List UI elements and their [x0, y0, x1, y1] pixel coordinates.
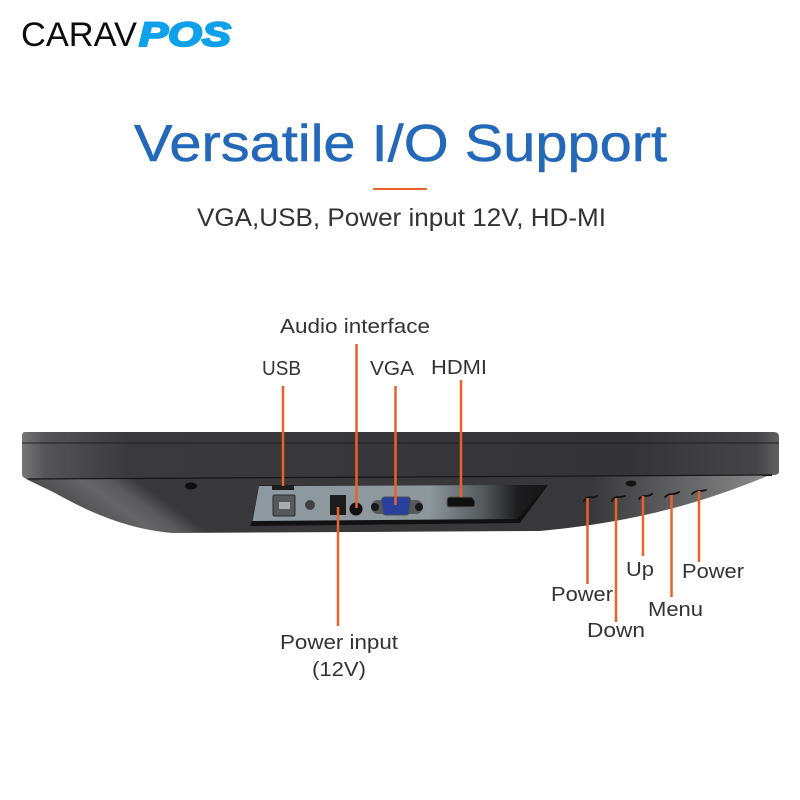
logo — [21, 16, 231, 54]
logo: CARAV — [21, 16, 137, 54]
label: HDMI: HDMI — [431, 357, 487, 379]
pointer: power button — [586, 498, 589, 584]
VGA port — [371, 497, 423, 515]
port plate — [252, 485, 547, 524]
logo: POS — [139, 16, 231, 54]
band bottom shadow line — [28, 475, 772, 479]
pointer: VGA — [394, 386, 397, 505]
monitor underside — [22, 432, 779, 533]
screw hole right — [626, 480, 636, 486]
pointer: audio interface — [355, 344, 358, 508]
band seam line — [22, 442, 779, 444]
power input port — [330, 495, 346, 515]
recess shadow — [250, 485, 548, 526]
label: second power: Power — [682, 561, 744, 583]
pointer: HDMI — [460, 380, 462, 497]
label: power input: Power input — [280, 632, 398, 654]
USB port — [272, 485, 295, 516]
port recess — [251, 485, 547, 525]
label: menu: Menu — [648, 599, 703, 621]
label: VGA: VGA — [370, 358, 415, 380]
title: Versatile I/O Support — [134, 115, 668, 173]
label: down: Down — [587, 620, 645, 642]
front buttons — [584, 490, 706, 501]
HDMI port — [447, 497, 475, 507]
label: power: Power — [551, 584, 613, 606]
screw — [305, 500, 315, 510]
subtitle: VGA,USB, Power input 12V, HD-MI — [197, 204, 606, 232]
pointer: second power button — [698, 491, 700, 562]
label: 12V: (12V) — [312, 659, 366, 681]
label: up: Up — [626, 559, 654, 581]
pointer: up button — [642, 496, 644, 556]
pointer: power input — [337, 507, 339, 626]
title underline accent — [373, 188, 427, 190]
label: USB: USB — [262, 358, 301, 380]
audio jack — [350, 502, 362, 516]
pointer lines — [283, 344, 699, 626]
port and button labels — [262, 316, 744, 681]
monitor lower body — [26, 470, 772, 533]
pointer: menu button — [670, 495, 673, 597]
pointer: down button — [615, 498, 617, 622]
pointer: USB — [282, 386, 284, 486]
monitor edge band — [22, 432, 779, 479]
label: audio interface: Audio interface — [280, 316, 430, 338]
screw hole left — [185, 482, 197, 490]
